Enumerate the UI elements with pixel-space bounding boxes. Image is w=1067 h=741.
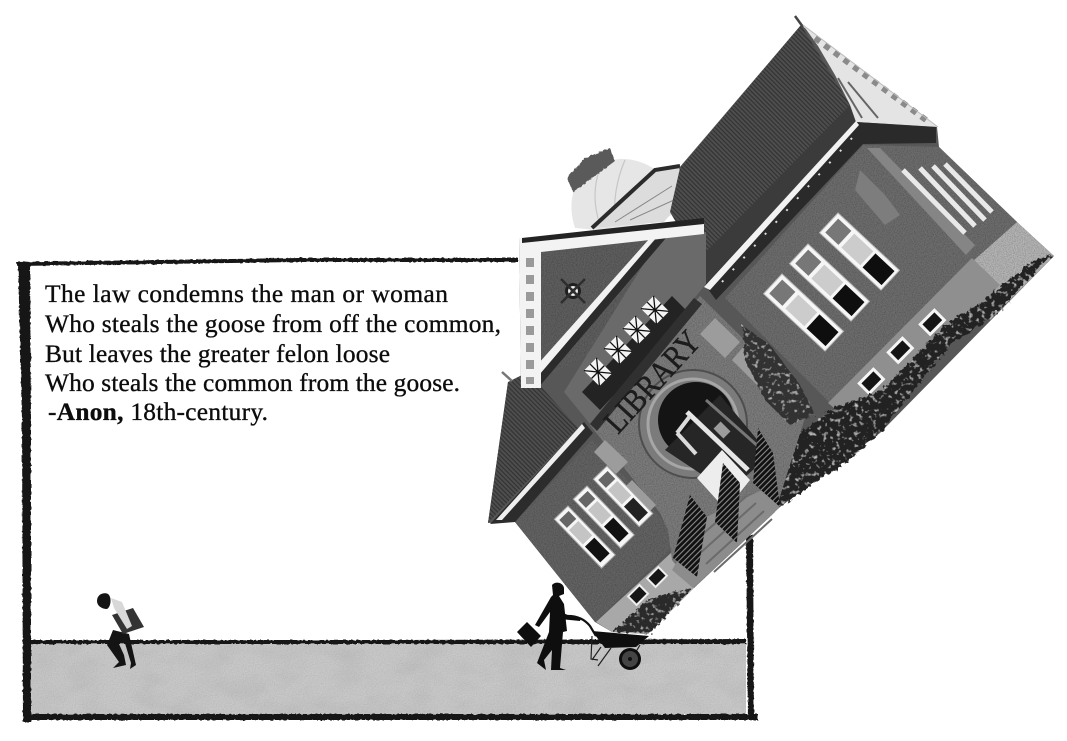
library sign text: LIBRARY xyxy=(597,324,708,440)
dentil cornice xyxy=(803,25,938,127)
wheelbarrow tray xyxy=(592,631,649,648)
figure: man pushing wheelbarrow xyxy=(517,583,649,670)
climbing vine xyxy=(742,325,815,425)
figure: hooded man carrying a bag xyxy=(97,593,144,669)
basement strip xyxy=(828,258,1000,430)
star window 1 xyxy=(584,358,612,386)
railings xyxy=(673,428,780,577)
poem text: But leaves the greater felon loose xyxy=(45,340,390,368)
poem text: The law condemns the man or woman xyxy=(45,280,448,308)
wheelbarrow legs xyxy=(591,636,640,666)
dormer wall with dark window band xyxy=(522,232,706,431)
poem text xyxy=(45,280,501,426)
front arm xyxy=(560,612,581,621)
gable roof and white column xyxy=(519,218,704,388)
lower left roof xyxy=(488,372,578,523)
row of star windows xyxy=(584,296,669,386)
bag xyxy=(112,608,144,634)
hand-drawn frame xyxy=(16,258,758,722)
shirt arm xyxy=(111,598,132,629)
man xyxy=(535,583,567,670)
poem text: -Anon, 18th-century. xyxy=(48,398,268,426)
left gable wall xyxy=(530,232,704,384)
right wall xyxy=(725,145,1017,403)
poem text: Who steals the goose from off the common, xyxy=(45,310,501,338)
arched doorway xyxy=(658,382,770,492)
main roof xyxy=(670,25,852,270)
left finial xyxy=(502,372,512,381)
star window 2 xyxy=(604,336,632,364)
cornice band and upper white trim xyxy=(704,121,936,300)
wheel xyxy=(619,648,641,670)
window C xyxy=(764,274,843,351)
left wall windows xyxy=(554,466,653,568)
briefcase xyxy=(517,622,541,647)
entrance tower xyxy=(590,296,810,588)
hedge along the base xyxy=(765,254,1052,510)
gable emblem xyxy=(561,279,585,303)
roof fascia xyxy=(696,105,856,285)
skylight dormer xyxy=(592,166,680,228)
window B xyxy=(790,244,869,321)
tower stone patches xyxy=(594,318,775,515)
flagpole finial xyxy=(795,16,803,27)
left eave trim xyxy=(490,422,593,524)
basement and shrub lower left xyxy=(596,552,696,634)
dome xyxy=(567,148,672,232)
window A xyxy=(820,213,899,290)
building silhouette underlay xyxy=(488,25,1054,634)
tilted library building xyxy=(488,16,1054,634)
right wall windows xyxy=(764,213,899,351)
star window 4 xyxy=(641,296,669,324)
star window 3 xyxy=(623,316,651,344)
gable end vents xyxy=(903,164,992,233)
front steps xyxy=(672,490,780,588)
basement windows xyxy=(859,310,944,393)
arch stone ring xyxy=(639,370,747,478)
head xyxy=(97,593,111,609)
window F xyxy=(554,506,615,568)
left wall xyxy=(515,440,680,622)
stone quoins xyxy=(867,148,975,255)
ground paper strip xyxy=(30,644,746,714)
window D xyxy=(593,466,653,527)
poem text: Who steals the common from the goose. xyxy=(45,369,460,397)
legs xyxy=(107,630,136,669)
lit landing xyxy=(697,450,750,510)
wheelbarrow handle xyxy=(568,616,596,636)
stone foundation xyxy=(972,222,1054,320)
window E xyxy=(573,486,634,548)
